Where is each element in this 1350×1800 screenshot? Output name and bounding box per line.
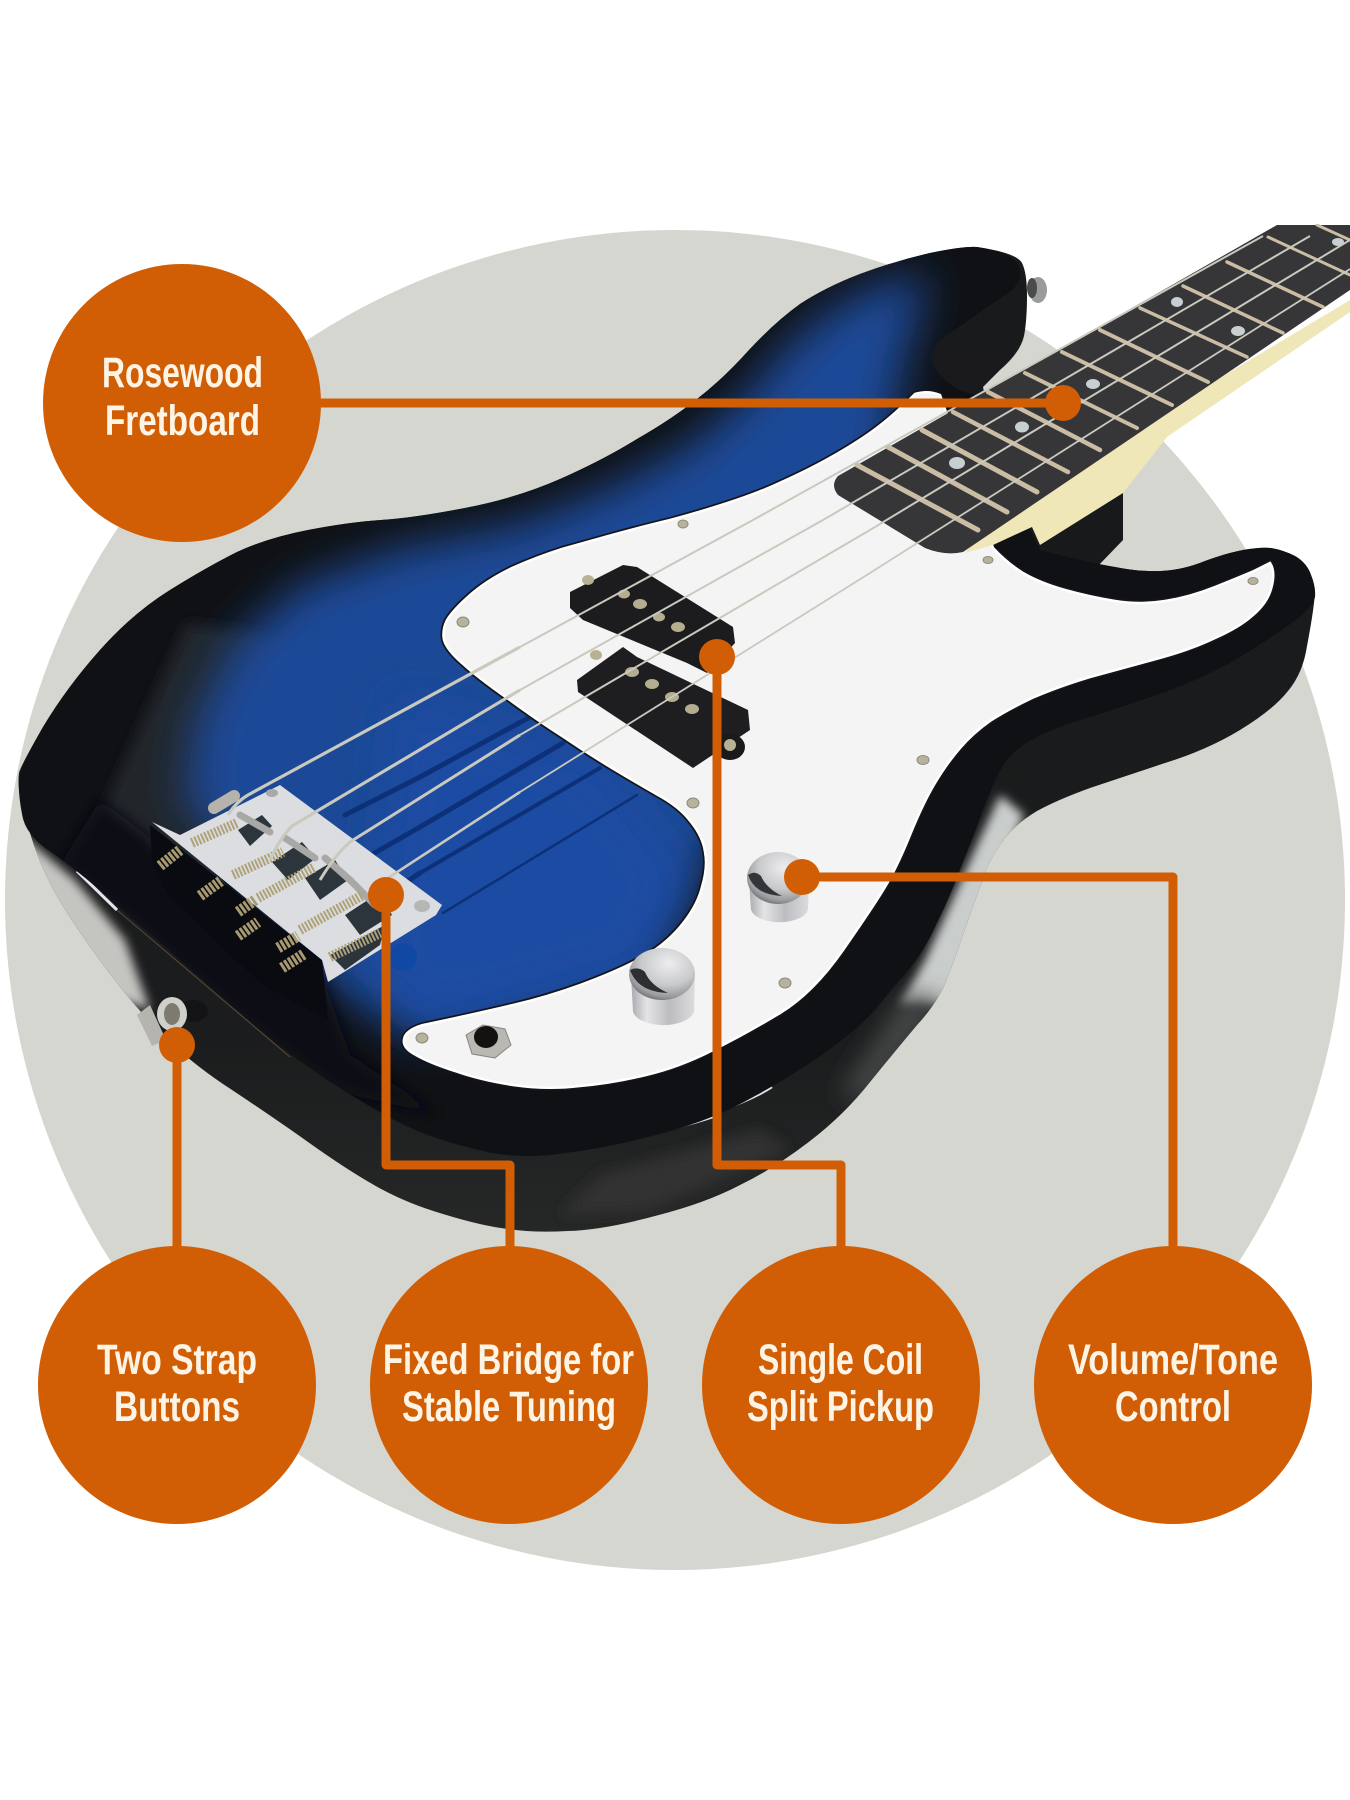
split pickup [570, 565, 750, 768]
callout: two strap buttons [38, 1246, 316, 1524]
intonation screws [160, 850, 304, 968]
callout line: fixed bridge [368, 877, 510, 1250]
pickguard screws [416, 520, 1258, 1043]
saddle springs [192, 823, 380, 957]
callout: rosewood fretboard: Fretboard [105, 397, 260, 445]
callout: rosewood fretboard: Rosewood [102, 349, 263, 397]
guitar illustration [18, 225, 1350, 1232]
neck heel [993, 493, 1123, 567]
upper strap button [1027, 277, 1047, 303]
fret inlay dots [949, 238, 1344, 469]
callout: fixed bridge [370, 1246, 648, 1524]
background circle [5, 230, 1345, 1570]
side highlights [20, 795, 1024, 1215]
bridge front face [150, 825, 328, 1020]
callout: two strap buttons: Two Strap [97, 1336, 257, 1384]
tone knob [629, 948, 695, 1025]
callout: volume and tone control: Volume/Tone [1068, 1336, 1278, 1384]
string reflections [345, 717, 637, 913]
pickguard [404, 392, 1273, 1088]
output jack [466, 1025, 511, 1058]
volume knob [747, 852, 809, 922]
guitar body side [18, 247, 1315, 1232]
callout line: rosewood fretboard [300, 385, 1081, 421]
fixed bridge [150, 785, 442, 1020]
callout: single coil split pickup: Split Pickup [747, 1383, 934, 1431]
saddle barrel [214, 796, 234, 808]
callout: single coil split pickup [702, 1246, 980, 1524]
sunburst finish [60, 275, 930, 1115]
callout: two strap buttons: Buttons [114, 1383, 240, 1431]
callout: volume and tone control [1034, 1246, 1312, 1524]
maple neck [965, 300, 1350, 553]
callout: single coil split pickup: Single Coil [758, 1336, 923, 1384]
callout line: split pickup [699, 639, 841, 1250]
frets [857, 225, 1350, 530]
callout: fixed bridge: Fixed Bridge for [383, 1336, 634, 1384]
callout: fixed bridge: Stable Tuning [402, 1383, 616, 1431]
guitar top face [19, 247, 1315, 1156]
callout line: two strap buttons [159, 1027, 195, 1250]
lower edge shadow [76, 802, 359, 1061]
saddle hardware [238, 815, 392, 970]
strings [228, 236, 1350, 880]
callout: rosewood fretboard [43, 264, 321, 542]
bridge shadow [389, 943, 417, 971]
callout line: volume and tone [784, 859, 1173, 1250]
callout: volume and tone control: Control [1115, 1383, 1231, 1431]
lower strap button [137, 997, 208, 1046]
fretboard [834, 225, 1350, 553]
bridge plate [152, 785, 442, 982]
